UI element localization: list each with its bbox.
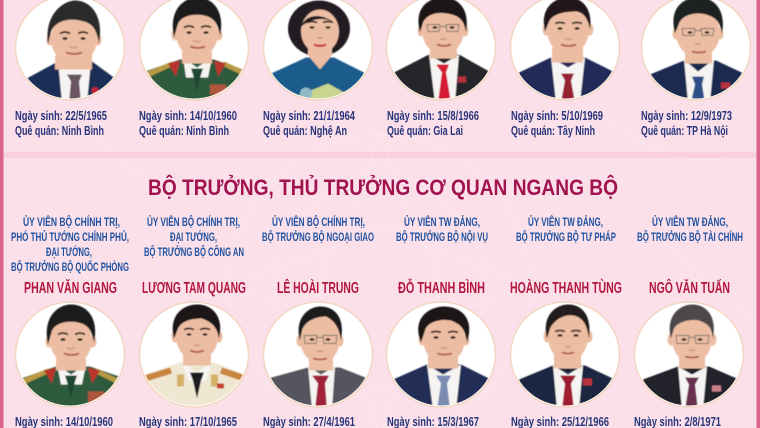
roles: ĐẠI TƯỚNG, <box>46 246 92 259</box>
portrait: top 1 <box>16 0 124 108</box>
roles: ĐẠI TƯỚNG, <box>170 231 217 244</box>
portrait: Đỗ Thanh Bình <box>386 302 496 414</box>
roles: ỦY VIÊN BỘ CHÍNH TRỊ, <box>272 216 365 229</box>
roles: ỦY VIÊN BỘ CHÍNH TRỊ, <box>147 216 240 229</box>
roles: ỦY VIÊN TW ĐẢNG, <box>404 216 480 229</box>
info: top row birth dates and hometowns <box>15 109 732 138</box>
roles: BỘ TRƯỞNG BỘ NGOẠI GIAO <box>262 231 374 244</box>
info: top row birth dates and hometowns: Ngày sinh: 22/5/1965 <box>15 109 107 123</box>
roles: BỘ TRƯỞNG BỘ NỘI VỤ <box>396 231 488 244</box>
info: top row birth dates and hometowns: Quê quán: Tây Ninh <box>511 124 595 138</box>
info: bottom row birth dates <box>15 415 721 428</box>
info: top row birth dates and hometowns: Quê quán: Nghệ An <box>263 124 347 138</box>
heading: BỘ TRƯỞNG, THỦ TRƯỞNG CƠ QUAN NGANG BỘ <box>148 175 618 200</box>
portrait: top 2 <box>140 0 249 108</box>
names: ĐỖ THANH BÌNH <box>398 279 485 297</box>
portrait: top 4 <box>386 0 496 108</box>
portrait: Hoàng Thanh Tùng <box>510 302 620 414</box>
roles: BỘ TRƯỞNG BỘ CÔNG AN <box>144 246 244 259</box>
info: top row birth dates and hometowns: Ngày sinh: 21/1/1964 <box>263 109 355 123</box>
info: top row birth dates and hometowns: Ngày sinh: 15/8/1966 <box>387 109 479 123</box>
names: PHAN VĂN GIANG <box>24 280 117 297</box>
roles: PHÓ THỦ TƯỚNG CHÍNH PHỦ, <box>11 231 129 244</box>
names: HOÀNG THANH TÙNG <box>510 279 622 297</box>
portrait: top 3 <box>264 0 372 108</box>
info: top row birth dates and hometowns: Quê quán: Ninh Bình <box>139 124 229 138</box>
roles: ỦY VIÊN TW ĐẢNG, <box>652 216 728 229</box>
info: top row birth dates and hometowns: Ngày sinh: 5/10/1969 <box>511 109 603 123</box>
names <box>24 279 730 297</box>
roles: BỘ TRƯỞNG BỘ QUỐC PHÒNG <box>11 260 129 274</box>
names: LÊ HOÀI TRUNG <box>277 279 359 297</box>
names: LƯƠNG TAM QUANG <box>142 280 246 297</box>
info: top row birth dates and hometowns: Quê quán: Ninh Bình <box>15 124 104 138</box>
roles: BỘ TRƯỞNG BỘ TƯ PHÁP <box>516 231 616 244</box>
roles: ỦY VIÊN TW ĐẢNG, <box>528 216 603 229</box>
portrait: Phan Văn Giang <box>16 302 125 414</box>
info: top row birth dates and hometowns: Quê quán: Gia Lai <box>387 124 463 138</box>
roles: ỦY VIÊN BỘ CHÍNH TRỊ, <box>23 216 120 229</box>
info: top row birth dates and hometowns: Ngày sinh: 14/10/1960 <box>139 109 237 123</box>
portrait: top 5 <box>510 0 620 108</box>
portrait: Lê Hoài Trung <box>264 302 372 414</box>
portrait: top 6 <box>642 0 750 108</box>
portrait: Ngô Văn Tuấn <box>634 302 744 414</box>
roles <box>11 216 743 274</box>
portrait: Lương Tam Quang <box>140 302 248 414</box>
